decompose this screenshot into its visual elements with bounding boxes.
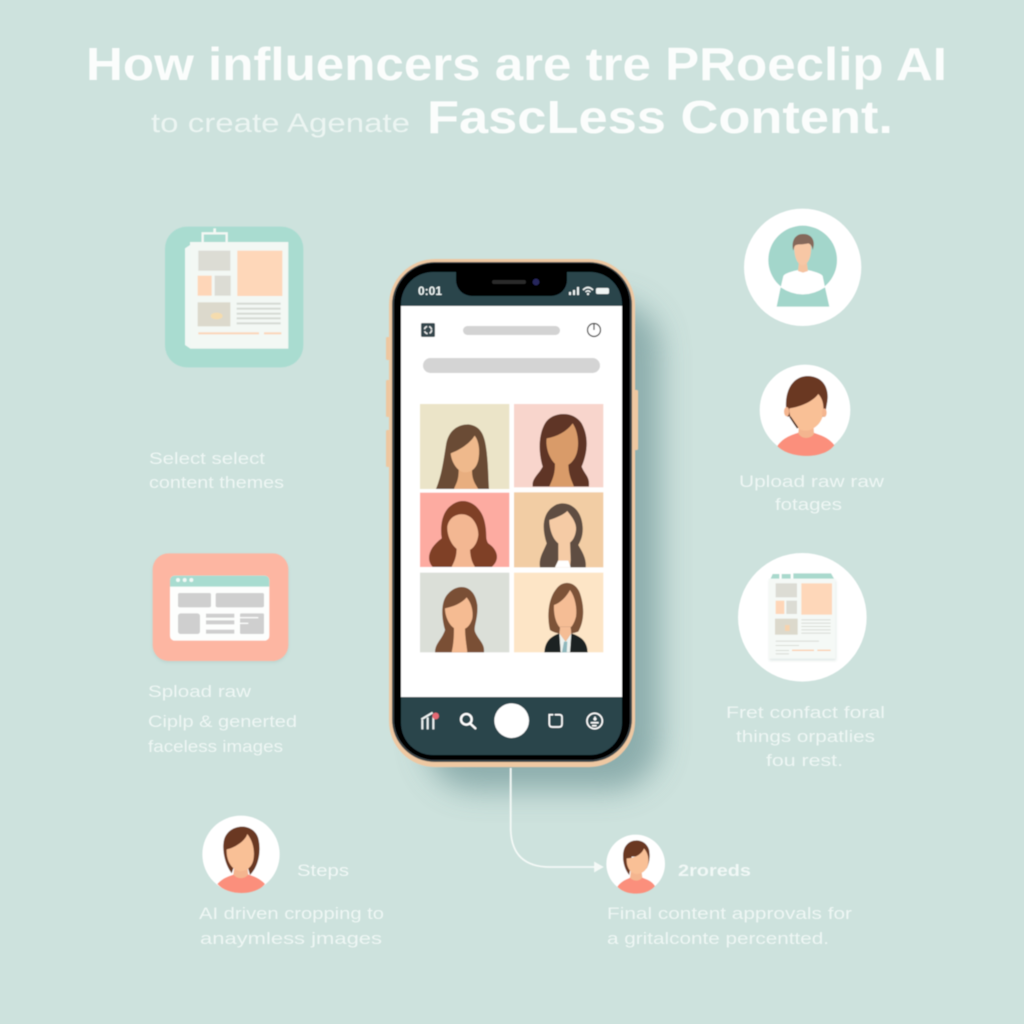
- text: final check: Fret confact foral: [726, 703, 885, 722]
- text: final check: things orpatlies: [736, 727, 875, 746]
- status icons: [569, 287, 609, 295]
- text: AI driven cropping: [199, 904, 384, 948]
- capture button: [494, 703, 529, 738]
- text: final check: [726, 703, 885, 770]
- text: AI driven cropping: anaymless jmages: [200, 929, 382, 948]
- text: final approvals: [607, 904, 852, 948]
- top bar: [463, 326, 560, 335]
- icon: avatar final: [606, 835, 665, 894]
- portrait 1: [420, 404, 509, 489]
- text: upload and generate: faceless images: [148, 737, 283, 756]
- icon: clipboard layout: [165, 227, 303, 367]
- text: select content themes: Select select: [149, 449, 265, 468]
- icon: avatar steps: [202, 816, 280, 893]
- text: upload and generate: Ciplp & generted: [148, 712, 297, 731]
- text: upload and generate: [148, 682, 297, 756]
- heading: 2roreds: 2roreds: [678, 861, 751, 880]
- text: final approvals: a gritalconte percentted.: [607, 929, 829, 948]
- notch: [456, 270, 567, 296]
- text: AI driven cropping: AI driven cropping to: [199, 904, 384, 923]
- title: to create Agenate: [151, 108, 410, 138]
- phone screen: [401, 270, 622, 755]
- heading: steps: Steps: [297, 861, 349, 880]
- text: upload raw footage: Upload raw raw: [739, 472, 885, 491]
- phone: [386, 259, 638, 767]
- title: How influencers are tre PRoeclip AI: [86, 38, 947, 90]
- status time: 0:01: [418, 286, 443, 298]
- repost icon: [549, 715, 562, 727]
- portrait 4: [514, 492, 603, 567]
- text: select content themes: [149, 449, 284, 492]
- text: final check: fou rest.: [766, 751, 843, 770]
- app icon: [421, 323, 435, 337]
- text: final approvals: Final content approvals for: [607, 904, 852, 923]
- search bar: [423, 358, 600, 373]
- phone shadow: [425, 300, 660, 790]
- icon: person in teal circle: [744, 209, 861, 326]
- portrait 2: [514, 404, 603, 487]
- icon: document in circle: [738, 553, 867, 682]
- text: upload raw footage: fotages: [775, 495, 842, 514]
- portrait 6: [514, 573, 603, 652]
- icon: avatar with coral shirt: [760, 365, 850, 456]
- arrow from phone to final step: [511, 768, 602, 871]
- text: upload and generate: Spload raw: [148, 682, 252, 701]
- bottom nav icons: [421, 703, 602, 738]
- search icon: [461, 714, 475, 728]
- portrait 5: [420, 573, 509, 652]
- icon: browser window: [153, 553, 288, 663]
- portrait 3: [420, 493, 509, 567]
- text: select content themes: content themes: [149, 473, 284, 492]
- power icon: [588, 324, 600, 336]
- text: upload raw footage: [739, 472, 885, 514]
- face icon: [587, 713, 602, 729]
- title: [86, 38, 947, 143]
- home chart icon: [421, 713, 433, 729]
- title: FascLess Content.: [427, 91, 893, 143]
- photo grid: [420, 404, 603, 652]
- phone side buttons: [386, 337, 638, 467]
